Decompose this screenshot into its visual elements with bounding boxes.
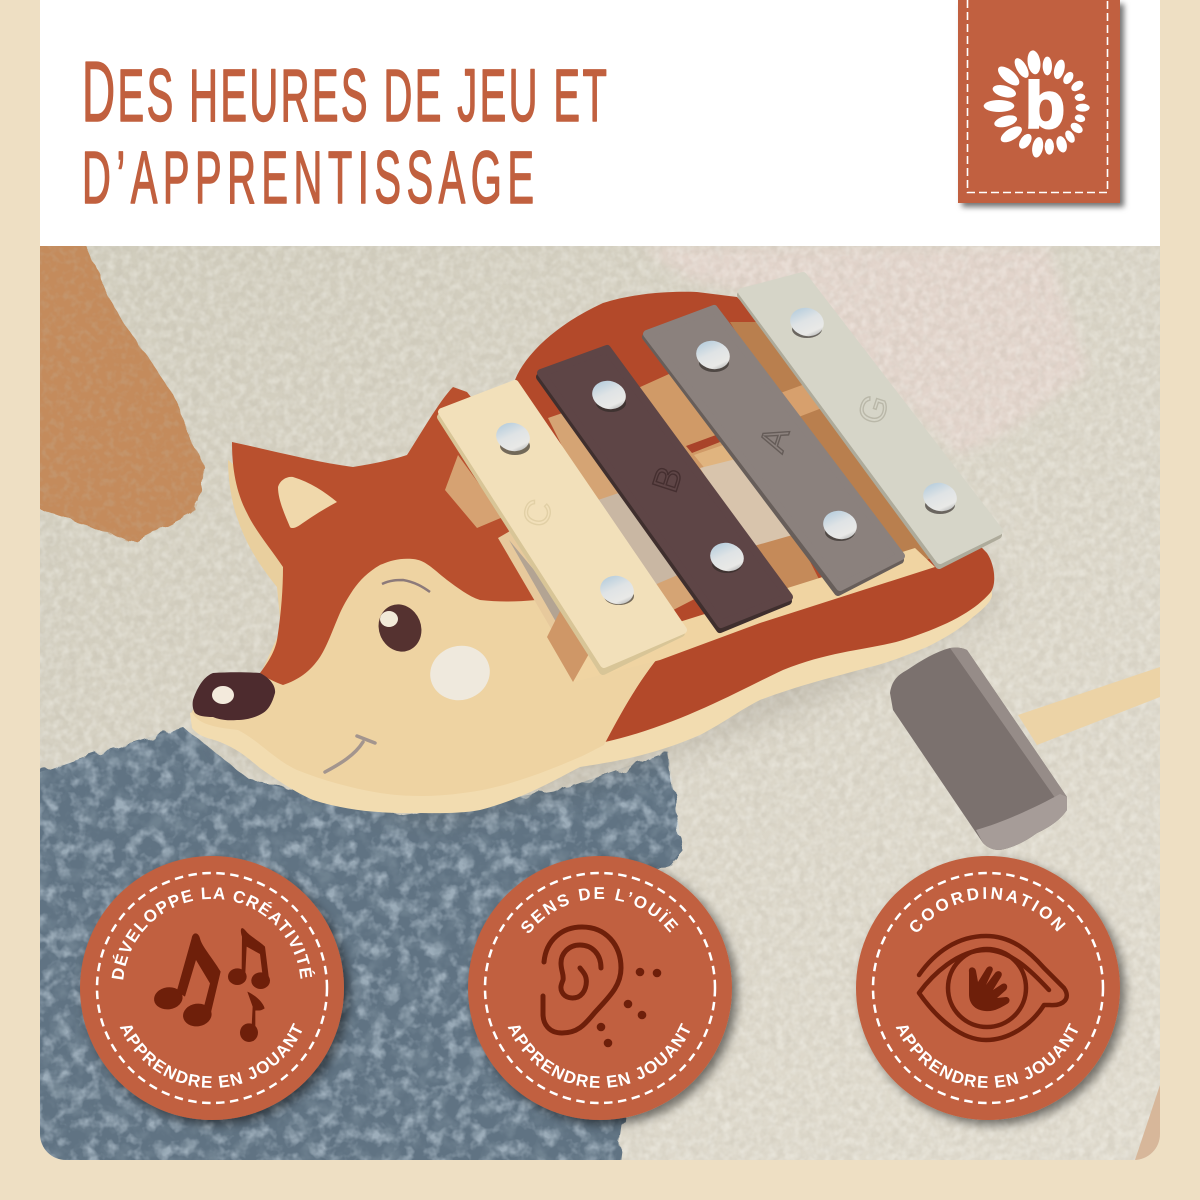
badge: coordination — [854, 854, 1132, 1132]
eye — [378, 604, 422, 652]
fox shadow — [224, 583, 998, 820]
title — [82, 45, 607, 219]
blue tufts — [40, 720, 690, 1160]
white header band — [40, 0, 1160, 246]
badge: ouïe — [467, 855, 744, 1131]
rug patch: pink — [660, 248, 1076, 444]
cheek — [430, 646, 490, 700]
gap A-G light slat — [782, 385, 820, 416]
gap C-B rug window — [599, 493, 677, 584]
mouth — [325, 736, 375, 772]
cap — [976, 794, 1067, 850]
bar G — [741, 276, 999, 565]
fox: cream face — [192, 535, 660, 796]
gap B-A stripe — [686, 435, 720, 453]
mallet — [890, 648, 1160, 850]
rug patch: corner — [1135, 1085, 1160, 1160]
label: bottom: APPRENDRE EN JOUANT — [896, 1022, 1078, 1088]
title: DES HEURES DE JEU ET — [82, 45, 607, 140]
rug patch: orange — [30, 240, 205, 543]
ear wood side — [228, 460, 283, 618]
title: D’APPRENTISSAGE — [82, 136, 534, 219]
highlight — [950, 648, 1067, 802]
orange tufts — [40, 246, 210, 546]
bar C: C — [514, 494, 561, 532]
icon: eye with hand — [919, 936, 1067, 1040]
rug base — [40, 246, 1160, 1160]
left slot wood — [498, 532, 555, 628]
rivets — [493, 304, 960, 608]
rug patch: blue — [30, 727, 682, 1170]
label: top: SENS DE L’OUÏE — [521, 887, 678, 933]
fox: wood side — [190, 590, 992, 814]
bar G: G — [849, 389, 897, 429]
label: bottom: APPRENDRE EN JOUANT — [508, 1022, 690, 1088]
badge: créativité — [79, 855, 355, 1131]
eyebrow — [382, 580, 430, 592]
bar A: A — [751, 421, 797, 457]
head — [890, 648, 1067, 850]
gap B-A wood — [640, 374, 722, 475]
label: bottom: APPRENDRE EN JOUANT — [120, 1022, 302, 1088]
gap B-A rug window — [700, 460, 790, 546]
bar B: B — [644, 461, 690, 497]
rug texture — [702, 252, 1159, 1159]
bar B — [540, 349, 789, 629]
gap C-B wood — [548, 414, 694, 610]
xylophone wooden frame — [498, 322, 938, 682]
bar C — [441, 384, 683, 671]
label: top: COORDINATION — [910, 887, 1066, 932]
ear inner — [278, 477, 337, 528]
handle — [1018, 667, 1160, 745]
logo: flower with b — [984, 50, 1090, 158]
brand tag — [958, 0, 1120, 203]
lower plate — [654, 548, 935, 662]
bar A — [646, 309, 901, 592]
fox: red head — [232, 387, 536, 685]
icon: music notes — [153, 928, 270, 1042]
nose — [193, 672, 275, 720]
gap B-A light slat — [694, 445, 733, 467]
gap B-A lower slat — [756, 536, 818, 588]
wood block right — [547, 607, 590, 682]
gap A-G wood — [730, 322, 938, 575]
fox: red back — [515, 292, 994, 742]
photo: wooden fox xylophone on rug — [30, 240, 1160, 1170]
wood block left — [445, 455, 503, 528]
left slot rug — [510, 540, 560, 620]
logo: flower with b: b — [1025, 68, 1065, 142]
label: top: DÉVELOPPE LA CRÉATIVITÉ — [112, 887, 316, 980]
icon: ear — [543, 927, 661, 1047]
